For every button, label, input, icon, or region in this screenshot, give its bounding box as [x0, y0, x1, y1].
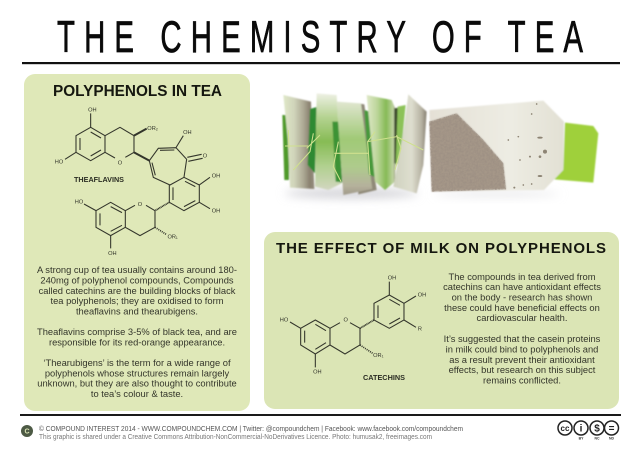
- chemical structure: theaflavins: O: [118, 160, 123, 166]
- chemical structure: catechins: OH: [388, 276, 396, 282]
- chemical structure: theaflavins: OH: [88, 108, 97, 114]
- panel: polyphenols in tea: [24, 74, 250, 411]
- text block: polyphenols description: tea polyphenols; they are oxidised to form: [51, 296, 224, 306]
- text block: polyphenols description: called catechins are the building blocks of black: [39, 286, 236, 296]
- chemical structure: theaflavins: O: [203, 154, 208, 160]
- text block: polyphenols description: to tea’s colour & taste.: [91, 389, 183, 399]
- text block: milk effect description: catechins can have antioxidant effects: [443, 282, 601, 292]
- icon: creative commons licence badges: $: [594, 424, 600, 434]
- chemical structure: theaflavins: [55, 108, 220, 257]
- text block: milk effect description: effects, but research on this subject: [449, 365, 596, 375]
- chemical structure: theaflavins: OH: [212, 174, 220, 180]
- chemical structure: theaflavins: OR₂: [147, 126, 158, 132]
- chemical structure: catechins: OH: [418, 292, 426, 298]
- header rule: [22, 62, 620, 64]
- icon: creative commons licence badges: ND: [609, 436, 614, 440]
- text block: polyphenols description: A strong cup of tea usually contains around 180-: [37, 265, 237, 275]
- text block: polyphenols description: 240mg of polyphenol compounds, Compounds: [40, 276, 234, 286]
- text block: polyphenols description: Theaflavins comprise 3-5% of black tea, and are: [37, 327, 237, 337]
- chemical structure: theaflavins: OH: [183, 130, 192, 136]
- text block: polyphenols description: ‘Thearubigens’ is the term for a wide range of: [43, 358, 231, 368]
- chemical structure: catechins: HO: [280, 318, 289, 324]
- icon: creative commons licence badges: =: [609, 424, 615, 434]
- chemical structure: theaflavins: HO: [55, 160, 64, 166]
- footer credits: [39, 425, 463, 441]
- panel: the effect of milk on polyphenols: [264, 232, 619, 409]
- chemical structure: catechins: R: [418, 326, 422, 332]
- chemical structure: theaflavins: OR₁: [167, 235, 178, 241]
- text block: milk effect description: in milk could bind to polyphenols and: [446, 344, 598, 354]
- icon: creative commons licence badges: BY: [579, 436, 584, 440]
- title: THE CHEMISTRY OF TEA: [57, 12, 584, 61]
- text block: polyphenols description: responsible for its red-orange appearance.: [49, 338, 225, 348]
- text block: milk effect description: these could have beneficial effects on: [444, 303, 600, 313]
- text block: milk effect description: It’s suggested that the casein proteins: [444, 334, 601, 344]
- chemical structure: catechins: O: [343, 318, 348, 324]
- chemical structure: catechins: OR₁: [373, 353, 384, 359]
- chemical structure: catechins: [280, 276, 426, 375]
- text block: polyphenols description: [37, 265, 237, 399]
- heading: polyphenols in tea: POLYPHENOLS IN TEA: [53, 83, 222, 100]
- text block: milk effect description: cardiovascular health.: [477, 313, 567, 323]
- text block: polyphenols description: unknown, but they are also thought to contribute: [37, 378, 237, 388]
- icon: compound interest logo: C: [24, 428, 30, 436]
- chemical structure: theaflavins: OH: [212, 209, 220, 215]
- chemical structure: theaflavins: O: [138, 202, 143, 208]
- text block: milk effect description: remains conflicted.: [483, 376, 561, 386]
- footer rule: [20, 414, 621, 416]
- label: theaflavins: THEAFLAVINS: [74, 177, 124, 184]
- icon: creative commons licence badges: cc: [561, 424, 570, 433]
- chemical structure: theaflavins: HO: [75, 200, 84, 206]
- icon: creative commons licence badges: i: [580, 424, 583, 434]
- icon: creative commons licence badges: [558, 421, 618, 440]
- text block: milk effect description: The compounds in tea derived from: [449, 272, 596, 282]
- footer credits: This graphic is shared under a Creative Commons Attribution-NonCommercial-NoDerivatives Licence. Photo: humusak2, freeimages.com: [39, 434, 432, 441]
- text block: milk effect description: as a result prevent their antioxidant: [449, 355, 595, 365]
- chemical structure: catechins: OH: [313, 369, 322, 375]
- label: catechins: CATECHINS: [363, 375, 405, 382]
- text block: polyphenols description: polyphenols whose structures remain largely: [45, 368, 230, 378]
- icon: compound interest logo: [21, 425, 33, 437]
- heading: effect of milk: THE EFFECT OF MILK ON POLYPHENOLS: [276, 240, 606, 257]
- text block: milk effect description: [443, 272, 601, 386]
- chemical structure: theaflavins: OH: [108, 251, 117, 257]
- text block: polyphenols description: theaflavins and thearubigens.: [76, 306, 198, 316]
- footer credits: © COMPOUND INTEREST 2014 - WWW.COMPOUNDCHEM.COM | Twitter: @compoundchem | Facebook: www.facebook.com/compoundchem: [39, 425, 463, 433]
- text block: milk effect description: on the body - research has shown: [452, 292, 592, 302]
- photo: tea bags: [282, 93, 598, 198]
- icon: creative commons licence badges: NC: [594, 436, 600, 440]
